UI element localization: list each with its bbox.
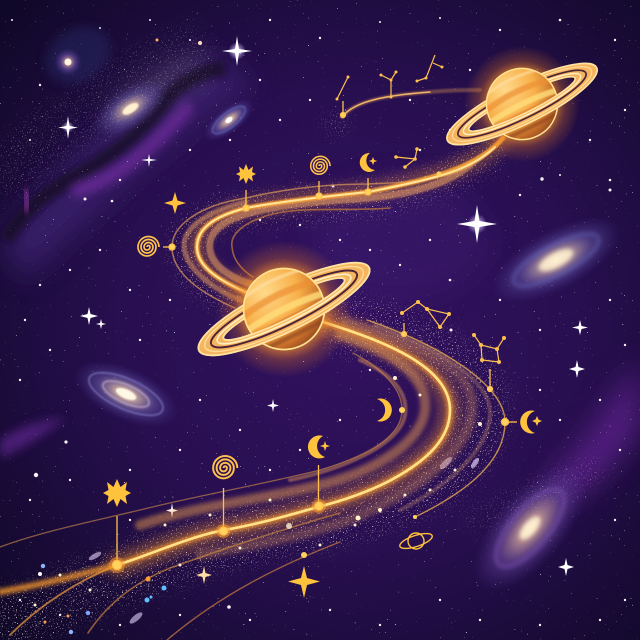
icon: spiral, lower (213, 456, 237, 478)
marker (216, 488, 230, 538)
milky way nebula (0, 50, 255, 280)
galaxy: top left (36, 15, 120, 95)
constellation: center (400, 300, 451, 329)
tiny galaxies (88, 455, 480, 625)
marker (340, 101, 346, 118)
purple nebula streaks (0, 180, 640, 505)
path sparkles (34, 376, 482, 634)
path: lower glow bands (0, 320, 505, 640)
path: top arc (342, 90, 480, 117)
timeline markers (109, 101, 517, 573)
ring front (446, 67, 598, 146)
ring back (189, 247, 379, 371)
bright sparkle stars (58, 36, 588, 584)
marker (436, 172, 442, 176)
constellation: top 4 (394, 147, 419, 169)
path: main upper bright line (197, 138, 503, 294)
icon: gold star, bottom (288, 566, 320, 598)
icon: small stars by crescents (320, 157, 542, 451)
marker (301, 552, 307, 558)
planet: center (197, 243, 371, 375)
marker (402, 323, 406, 336)
marker (243, 190, 249, 211)
planet body (472, 55, 572, 153)
marker (502, 418, 517, 426)
marker (413, 515, 417, 519)
planet body (227, 253, 341, 365)
ring back (439, 50, 605, 158)
constellation: top 1 (336, 76, 350, 100)
galaxy: milky way core (83, 68, 177, 148)
marker (109, 516, 125, 573)
constellations (336, 55, 506, 364)
icon: crescent, lower right (377, 398, 392, 421)
marker (312, 465, 326, 513)
planet: top right (446, 48, 598, 160)
galaxy: right (478, 200, 634, 320)
marker (399, 407, 405, 413)
ring front (198, 267, 371, 356)
icon: gold star, lower left (103, 479, 131, 507)
constellation: top 2 (380, 70, 398, 98)
constellation: top 3 (416, 55, 444, 82)
icon: small ringed planet (398, 531, 434, 551)
marker (488, 369, 492, 392)
galaxy: lower left (64, 347, 188, 441)
path: main lower bright line (0, 322, 450, 592)
icon: crescent, top (360, 153, 375, 172)
marker (163, 244, 175, 250)
galaxy: lower right (452, 445, 608, 611)
icon: crescent, right (520, 411, 535, 434)
icon: gold star, left (164, 192, 186, 214)
icon: spiral, left (138, 236, 159, 256)
marker (365, 178, 371, 195)
constellation: right (472, 333, 506, 364)
icon: crescent, center (308, 435, 325, 458)
icon: spiral, top (311, 156, 330, 174)
galaxy: small blue (197, 91, 261, 149)
icon: gold star, top (236, 164, 256, 184)
marker (316, 181, 322, 199)
path: upper glow bands (172, 90, 503, 308)
